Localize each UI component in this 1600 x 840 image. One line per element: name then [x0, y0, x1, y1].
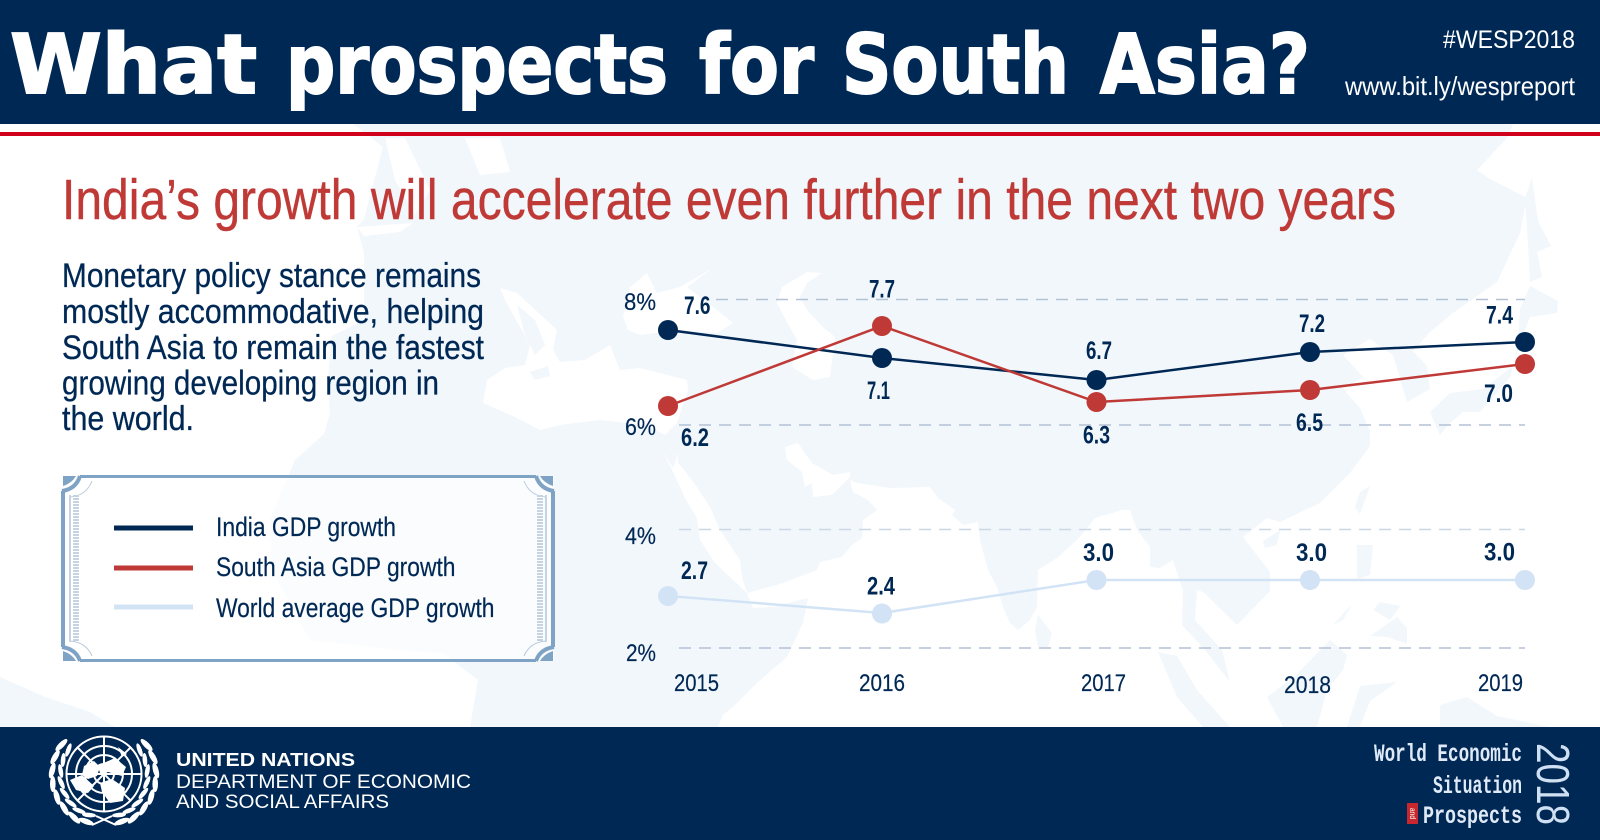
- body text: mostly accommodative, helping: [62, 293, 484, 331]
- data labels: 2.4: [867, 572, 895, 600]
- organisation name: [176, 749, 471, 813]
- data labels: 3.0: [1484, 538, 1515, 566]
- line chart: [624, 276, 1535, 699]
- header band: [0, 0, 1600, 124]
- y axis labels: 4%: [625, 523, 656, 550]
- title: [10, 18, 1310, 113]
- y axis labels: 6%: [625, 414, 656, 441]
- y axis labels: 2%: [626, 640, 656, 667]
- title: prospects: [286, 18, 668, 113]
- organisation name: DEPARTMENT OF ECONOMIC: [176, 772, 471, 793]
- red "and" tag: [1407, 803, 1418, 824]
- title: What: [10, 18, 257, 113]
- body text: Monetary policy stance remains: [62, 257, 481, 295]
- icon: UN emblem: [47, 736, 161, 827]
- body text: South Asia to remain the fastest: [62, 329, 484, 367]
- legend: India: [114, 512, 396, 542]
- background world map: [0, 124, 1558, 727]
- hashtag: #WESP2018: [1443, 26, 1575, 54]
- organisation name: AND SOCIAL AFFAIRS: [176, 792, 389, 813]
- India series: [658, 320, 1535, 390]
- legend: World: [114, 593, 494, 623]
- title: for: [699, 18, 814, 113]
- seas: [483, 288, 688, 435]
- title: South: [842, 18, 1069, 113]
- data labels: 6.2: [681, 424, 709, 452]
- legend panel: [62, 476, 554, 661]
- legend: South Asia: [114, 552, 456, 582]
- data labels: 2.7: [681, 557, 708, 585]
- organisation name: UNITED NATIONS: [176, 749, 355, 770]
- data labels: 7.0: [1484, 380, 1513, 408]
- y axis labels: 8%: [624, 289, 656, 316]
- red "and" tag: and: [1408, 808, 1417, 819]
- legend frame: [62, 476, 554, 661]
- x axis labels: 2017: [1081, 670, 1126, 697]
- WESP report logo: [1374, 740, 1579, 831]
- WESP report logo: Situation: [1433, 772, 1522, 801]
- footer band: [0, 727, 1600, 840]
- world series: [658, 570, 1535, 624]
- WESP report logo: World Economic: [1374, 740, 1522, 769]
- data labels: 7.4: [1486, 302, 1513, 330]
- data labels: 7.1: [867, 377, 890, 405]
- legend: South Asia: South Asia GDP growth: [216, 552, 456, 582]
- x axis labels: 2019: [1478, 670, 1523, 697]
- data labels: 7.7: [869, 276, 895, 304]
- data labels: 6.5: [1296, 409, 1323, 437]
- y axis labels: [624, 289, 656, 667]
- data labels: 3.0: [1296, 539, 1327, 567]
- body text: the world.: [62, 400, 194, 438]
- report url: www.bit.ly/wespreport: [1344, 71, 1576, 101]
- data labels: [681, 276, 1515, 600]
- body text: growing developing region in: [62, 364, 439, 402]
- red rule: [0, 132, 1600, 136]
- legend: India: India GDP growth: [216, 512, 396, 542]
- legend: World: World average GDP growth: [216, 593, 494, 623]
- data labels: 7.2: [1299, 310, 1325, 338]
- data labels: 6.3: [1083, 422, 1110, 450]
- data labels: 6.7: [1086, 337, 1112, 365]
- body text: [62, 257, 484, 438]
- South Asia series: [658, 316, 1535, 416]
- subtitle: India’s growth will accelerate even further in the next two years: [62, 168, 1396, 232]
- title: Asia?: [1100, 18, 1310, 113]
- data labels: 3.0: [1083, 539, 1114, 567]
- x axis labels: [674, 670, 1523, 699]
- x axis labels: 2018: [1284, 672, 1331, 699]
- WESP report logo: Prospects: [1423, 802, 1522, 831]
- x axis labels: 2016: [859, 670, 905, 697]
- data labels: 7.6: [684, 292, 710, 320]
- x axis labels: 2015: [674, 670, 719, 697]
